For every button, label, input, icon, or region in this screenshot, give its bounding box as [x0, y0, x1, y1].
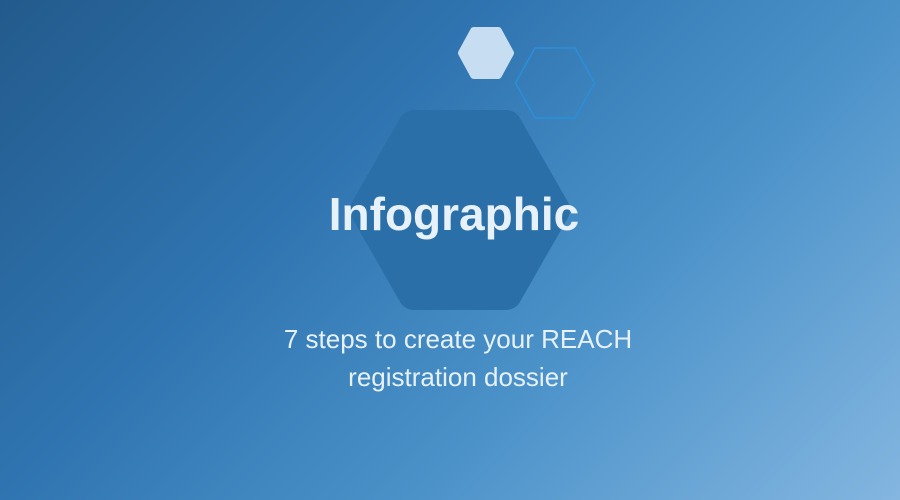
outline hexagon: [516, 48, 594, 118]
subtitle: [284, 324, 632, 392]
subtitle: registration dossier: [348, 362, 568, 392]
subtitle: 7 steps to create your REACH: [284, 324, 632, 354]
title: Infographic: [329, 188, 579, 240]
big hexagon: [366, 126, 554, 294]
small filled hexagon: [462, 31, 510, 75]
